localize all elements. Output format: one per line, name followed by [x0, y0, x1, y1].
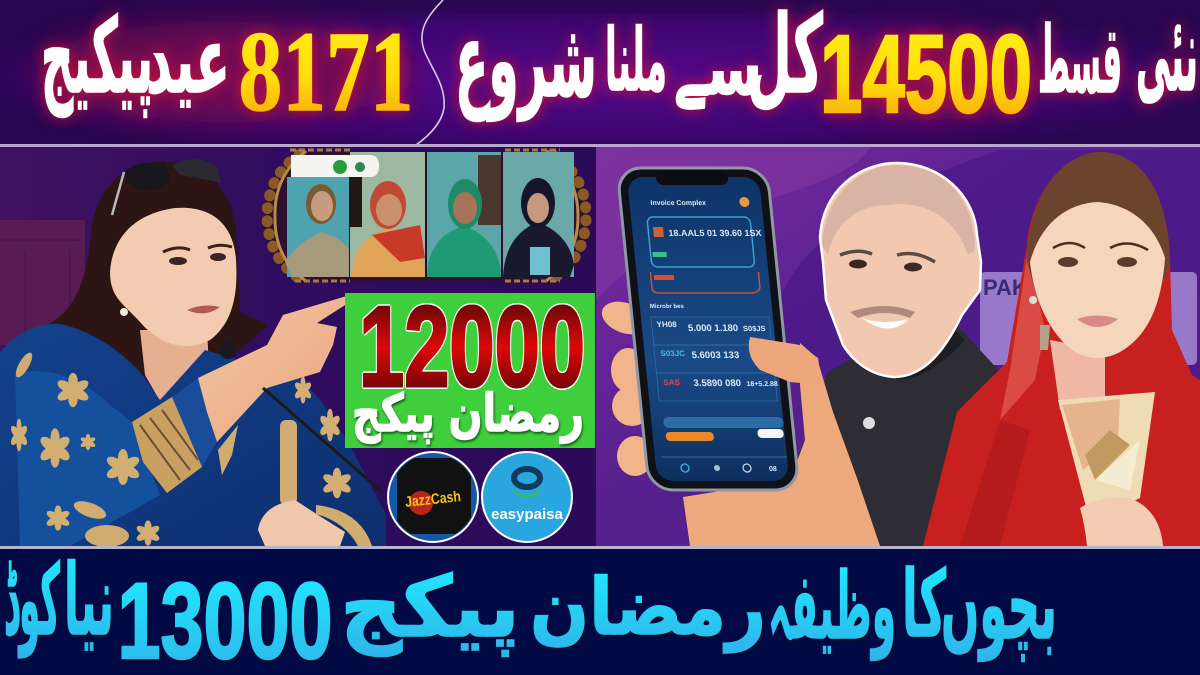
green callout: 12000 Ramadan package: 12000 — [359, 284, 585, 411]
phone screen: 08 — [769, 466, 777, 473]
microphone — [263, 388, 382, 492]
photo 4 — [503, 152, 574, 277]
bottom headline: کوڈ — [4, 544, 60, 658]
phone screen: 18.AAL5 01 39.60 1SX — [668, 228, 762, 238]
top banner — [0, 0, 1200, 145]
headline: new instalment: ملنا — [605, 11, 667, 111]
banknotes — [1058, 392, 1155, 522]
right panel background — [596, 147, 1200, 547]
bottom headline: نیا — [64, 544, 114, 658]
headline: Eid package: 8171 — [238, 8, 414, 135]
bottom headline: رمضان — [530, 563, 766, 653]
blue dress — [0, 324, 386, 546]
bottom banner: بچوں — [941, 549, 1057, 662]
face and neck — [1050, 340, 1105, 410]
phone screen — [626, 170, 789, 481]
palm — [683, 343, 880, 546]
horizontal divider lines — [0, 144, 1200, 549]
headline: new instalment — [455, 0, 1198, 136]
logo: JazzCash — [388, 452, 478, 542]
person: man in black sherwani — [690, 163, 1003, 546]
phone screen: YH08 — [656, 320, 678, 329]
phone screen: Microbr bes — [650, 304, 685, 310]
logo: Easypaisa — [482, 452, 572, 542]
headline: new instalment: سے — [674, 23, 762, 112]
phone screen: 3.5890 080 — [693, 378, 742, 389]
headline: Eid package: عید — [146, 7, 230, 114]
hair — [1027, 152, 1170, 290]
bottom headline: کا — [902, 551, 946, 658]
photo 1 — [285, 177, 349, 277]
sunglasses — [112, 159, 221, 215]
green callout: 12000 Ramadan package — [345, 284, 595, 448]
thumb — [749, 337, 822, 385]
phone screen: 18+5.2.88 — [746, 381, 778, 388]
ornate photo frame with four women — [264, 150, 588, 281]
right panel background: PAK — [983, 275, 1028, 300]
headline: new instalment: 14500 — [820, 13, 1032, 136]
phone screen: SAS — [663, 378, 681, 387]
bottom banner — [0, 544, 1200, 675]
person: woman in red scarf holding banknotes — [923, 152, 1200, 546]
headline: Eid package — [41, 0, 414, 135]
phone body — [617, 168, 799, 490]
logo: JazzCash: JazzCash — [404, 488, 462, 511]
face — [110, 208, 236, 346]
green callout: 12000 Ramadan package: 12000 — [359, 284, 585, 411]
forearm and pointing hand — [198, 295, 353, 442]
neck — [140, 330, 210, 410]
gold flower motifs — [10, 350, 372, 547]
hand — [1080, 497, 1163, 546]
logo banner — [291, 155, 379, 177]
photo 2 — [350, 152, 425, 277]
hair — [45, 162, 268, 380]
bottom headline: پیکج — [340, 558, 520, 657]
phone held in hand — [597, 168, 880, 546]
fingers — [597, 296, 653, 476]
phone screen: S0$JS — [743, 324, 766, 333]
headline: new instalment: شروع — [455, 0, 597, 122]
green callout: 12000 Ramadan package: رمضان پیکج — [352, 384, 584, 444]
left panel background — [0, 147, 596, 547]
phone screen: 5.000 1.180 — [688, 323, 739, 334]
head — [820, 163, 981, 377]
bottom headline — [4, 544, 1057, 675]
lower hand — [258, 500, 345, 546]
phone screen: Invoice Complex — [650, 200, 706, 207]
photo 3 — [427, 152, 501, 277]
logo: Easypaisa: easypaisa — [491, 506, 564, 523]
bottom headline: وظیفہ — [768, 553, 896, 661]
phone screen: 5.6003 133 — [691, 350, 740, 361]
person: woman pointing — [0, 159, 386, 547]
embroidered cuff — [132, 397, 202, 493]
phone screen: S03JC — [660, 349, 686, 358]
